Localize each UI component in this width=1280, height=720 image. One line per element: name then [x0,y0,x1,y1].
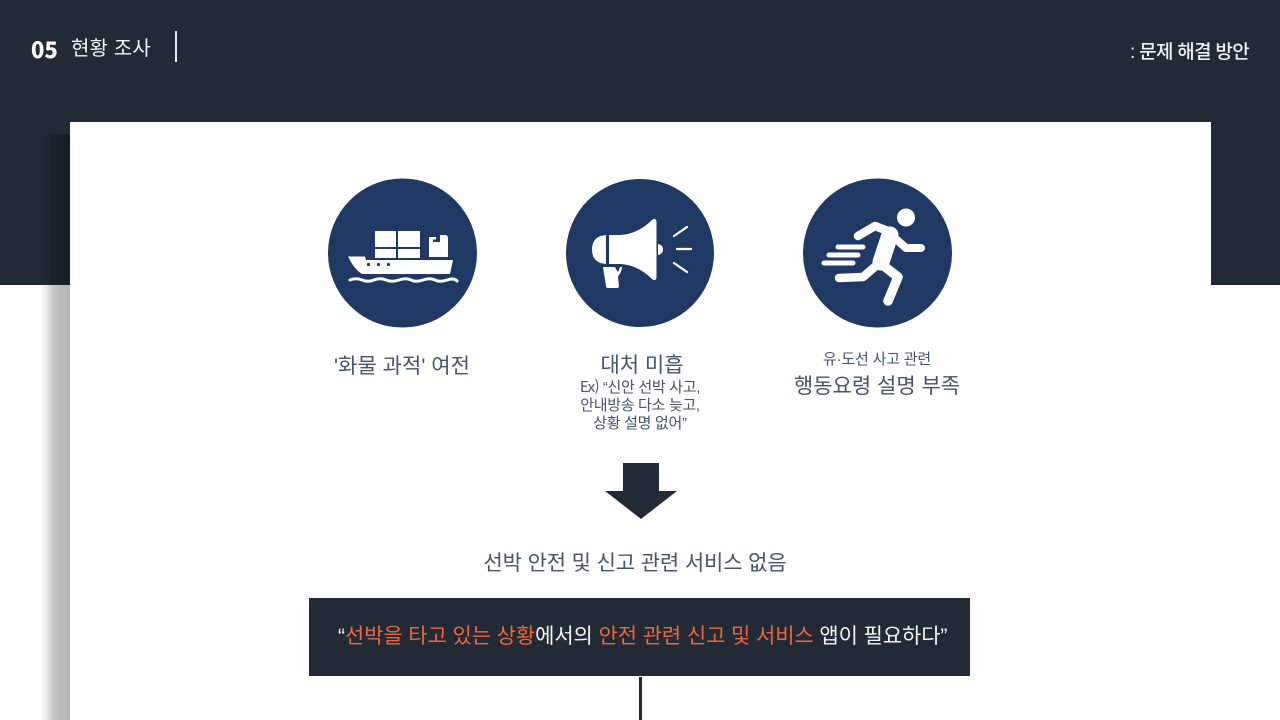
text: response example: 안내방송 다소 늦고, [580,397,700,414]
label: response: 대처 미흡 [600,354,684,377]
label: cargo overload: '화물 과적' 여전 [334,355,470,378]
header band [0,0,1280,285]
connector line [639,677,642,720]
section title: 현황 조사 [71,38,151,60]
text: no service: 선박 안전 및 신고 관련 서비스 없음 [483,552,787,575]
arrow down [605,463,677,519]
label: lack of guidance: 행동요령 설명 부족 [794,375,960,398]
section number: 05 [31,33,58,65]
white content panel [70,122,1211,720]
text: response example [580,376,700,432]
header divider [175,31,177,62]
panel shadow [40,134,70,720]
label: passenger ship accident: 유·도선 사고 관련 [823,351,931,368]
callout [309,598,970,676]
callout text: “선박을 타고 있는 상황에서의 안전 관련 신고 및 서비스 앱이 필요하다” [338,625,947,648]
subtitle: : 문제 해결 방안 [1130,42,1249,63]
text: response example: Ex) “신안 선박 사고, [580,376,700,397]
text: response example: 상황 설명 없어” [593,415,687,432]
